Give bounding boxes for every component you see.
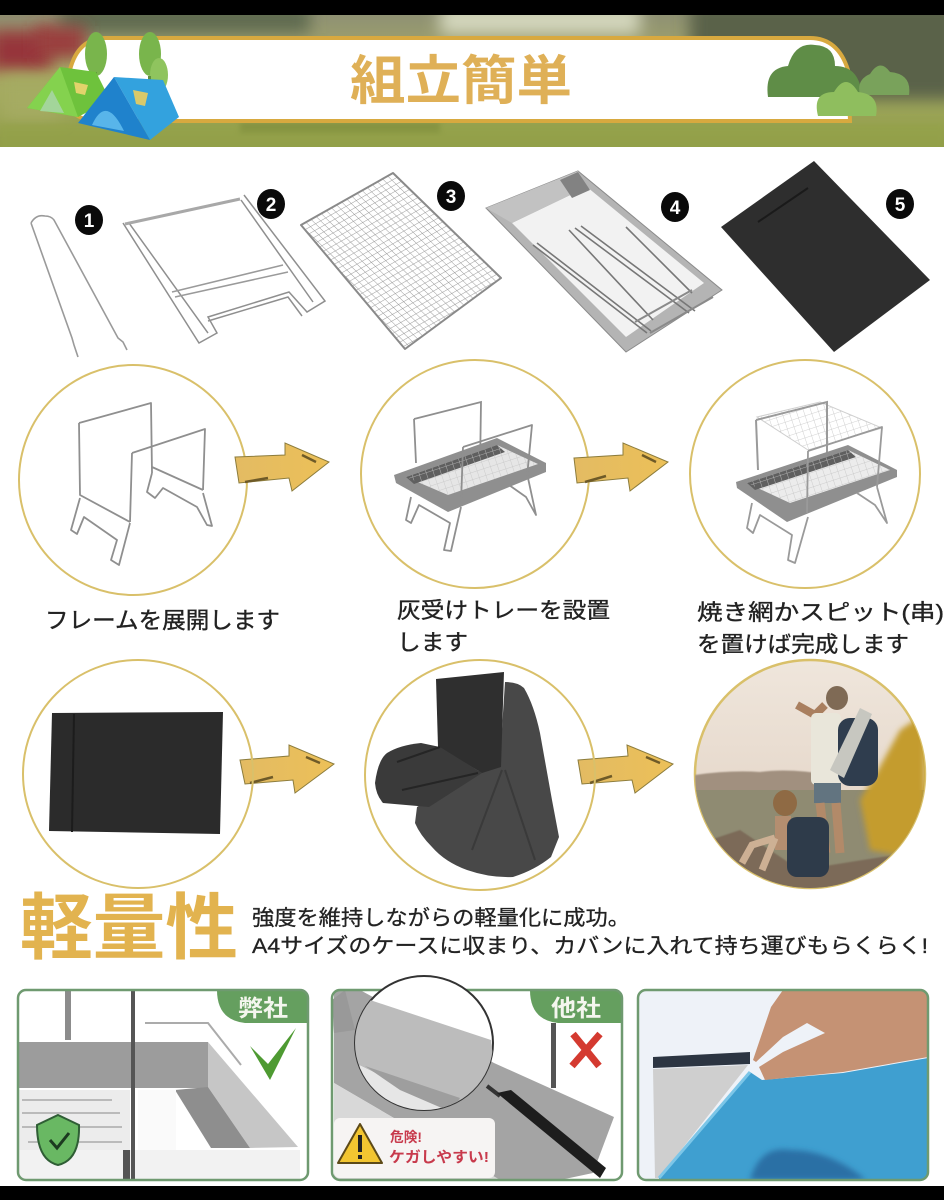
tray behind film — [653, 1052, 750, 1178]
front frame and legs — [747, 427, 887, 563]
tab: 他社 — [530, 990, 622, 1023]
bag flap — [375, 743, 482, 807]
banner photo background — [0, 15, 944, 147]
panel: other company — [332, 976, 622, 1180]
icon: blue tent — [78, 77, 179, 140]
ash tray — [736, 445, 897, 522]
number 5: 5 — [895, 195, 906, 216]
arrow 1 — [235, 443, 329, 491]
number 5 — [886, 189, 914, 219]
part 3: grill net — [301, 173, 501, 349]
tab: 他社: 他社 — [551, 995, 601, 1021]
pouch sticking out — [436, 672, 504, 773]
seated hiker — [742, 790, 829, 877]
grill net — [757, 402, 882, 450]
arrow 3 — [240, 745, 334, 793]
number 3: 3 — [446, 187, 456, 208]
back frame — [414, 402, 481, 470]
icon: shield — [37, 1115, 79, 1165]
icon: bushes on the right — [767, 45, 909, 116]
bottom black bar — [0, 1186, 944, 1200]
back frame — [756, 402, 827, 493]
circle: hikers photo — [695, 660, 925, 900]
number 2 — [257, 189, 285, 219]
arrow 2 — [574, 443, 668, 491]
caption 2 line 1: 灰受けトレーを設置 — [397, 598, 610, 623]
icon: check mark — [250, 1028, 296, 1080]
caption 2 line 2: します — [397, 630, 468, 655]
standing hiker — [797, 686, 878, 853]
warning text: 危険! — [390, 1129, 422, 1145]
part 4: ash tray with skewers — [486, 171, 722, 352]
step circle 2: tray placed — [361, 360, 589, 588]
tab: 弊社 — [217, 990, 308, 1023]
description line 1: 強度を維持しながらの軽量化に成功。 — [252, 907, 630, 930]
caption 3 line 1: 焼き網かスピット(串) — [697, 600, 944, 625]
number 1: 1 — [84, 211, 95, 232]
number 2: 2 — [266, 195, 276, 216]
step circle 1: frame unfolded — [19, 365, 247, 595]
caption 1: フレームを展開します — [45, 607, 280, 633]
icon: trees behind tents — [85, 32, 168, 92]
part 2: folding frame — [123, 189, 325, 343]
tray edge — [18, 1023, 300, 1180]
step captions — [45, 598, 944, 657]
rods — [65, 990, 71, 1040]
panel: our product — [18, 990, 308, 1180]
heading: lightweight: 軽量性 — [20, 889, 238, 969]
number 4: 4 — [670, 198, 681, 219]
part 1: tongs — [31, 205, 127, 357]
blue film — [659, 1058, 928, 1180]
icon: green tent — [27, 67, 110, 117]
number 3 — [437, 181, 465, 211]
icon: warning triangle — [338, 1124, 382, 1163]
arrow 4 — [578, 745, 673, 793]
description line 2: A4サイズのケースに収まり、カバンに入れて持ち運びもらくらく! — [252, 935, 928, 958]
lightweight description — [252, 907, 928, 958]
front frame and legs — [406, 425, 536, 551]
circle: frame stored in bag — [365, 660, 595, 890]
panel: blue protective film — [638, 990, 928, 1180]
tray edge — [332, 990, 614, 1180]
bag body — [415, 682, 559, 877]
banner: campsite header — [0, 15, 944, 147]
top black bar — [0, 0, 944, 15]
number 1 — [75, 205, 103, 235]
part 5: black storage pouch — [721, 161, 930, 352]
circle: folded pouch — [23, 660, 253, 888]
tab: 弊社: 弊社 — [238, 995, 288, 1021]
magnifying glass — [355, 976, 606, 1178]
warning box: ケガしやすい! — [389, 1149, 489, 1166]
step circle 3: grill on frame — [690, 360, 920, 588]
title: 組立簡単 — [350, 52, 572, 111]
parts row — [31, 161, 930, 357]
autumn tree — [860, 713, 925, 860]
icon: red cross — [572, 1034, 600, 1066]
ash tray — [394, 438, 546, 512]
number 4 — [661, 192, 689, 222]
rod — [551, 1023, 556, 1088]
hand — [753, 990, 928, 1080]
caption 3 line 2: を置けば完成します — [697, 632, 909, 657]
banner plate with gold border — [68, 38, 850, 121]
warning box — [334, 1118, 495, 1178]
